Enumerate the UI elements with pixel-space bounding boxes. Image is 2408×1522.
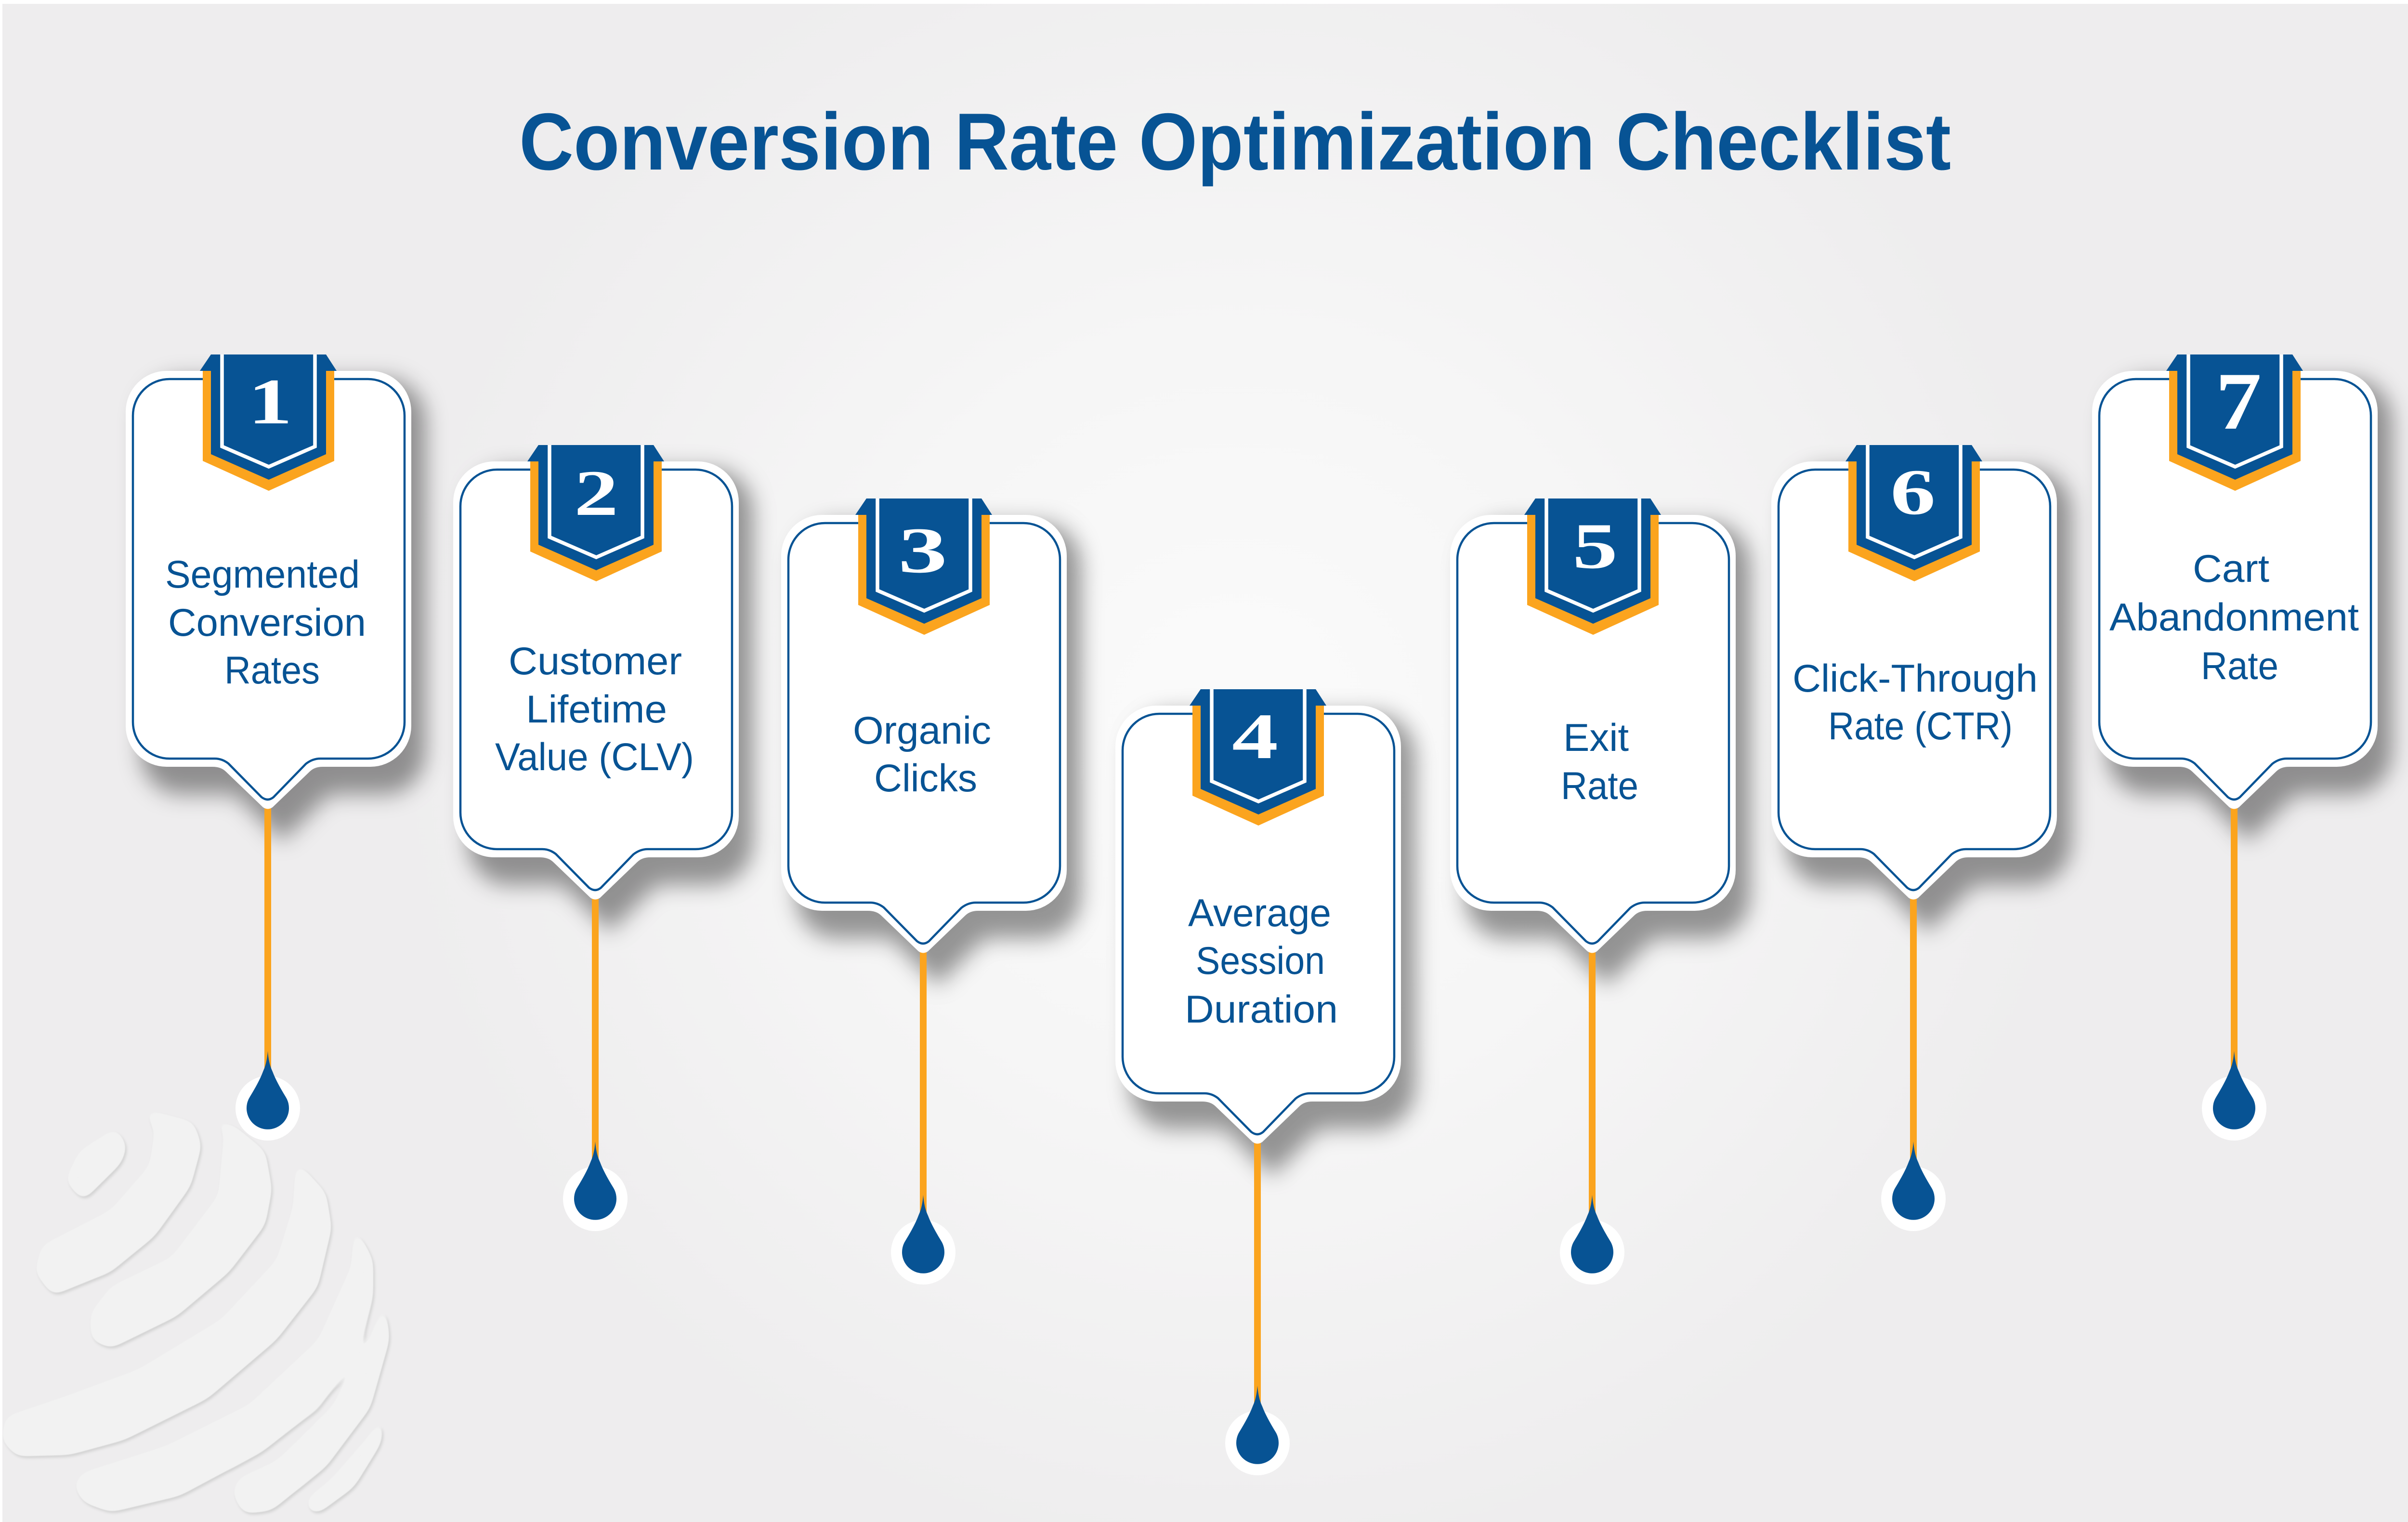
ribbon badge 4 (1190, 689, 1326, 826)
number 7: 7 (2215, 356, 2262, 446)
label 2 (495, 640, 694, 779)
ribbon badge 5 (1524, 499, 1661, 635)
callout panel 7 (2092, 371, 2378, 809)
number 2: 2 (574, 458, 618, 529)
label 1: Segmented (165, 553, 360, 596)
card 7: Cart Abandonment Rate (2092, 354, 2392, 1141)
label 5: Exit (1563, 716, 1629, 760)
card 1: Segmented Conversion Rates (126, 354, 426, 1141)
title: Conversion Rate Optimization Checklist (519, 96, 1951, 187)
number 4: 4 (1232, 701, 1278, 773)
number 6: 6 (1890, 457, 1936, 528)
label 7: Cart (2193, 547, 2269, 590)
callout panel 6 (1771, 461, 2057, 900)
label 4 (1185, 892, 1338, 1031)
drop marker 2 (563, 1142, 628, 1231)
connector line 7 (2231, 807, 2238, 1081)
connector line 5 (1589, 951, 1596, 1225)
ribbon badge 7 (2166, 354, 2303, 491)
label 6 (1793, 657, 2038, 748)
label 1: Rates (224, 649, 320, 692)
callout panel 1 (126, 371, 411, 809)
label 4: Duration (1185, 988, 1338, 1031)
label 6: Rate (CTR) (1828, 705, 2013, 748)
ribbon badge 3 (855, 499, 992, 635)
drop marker 4 (1225, 1386, 1290, 1475)
ribbon badge 6 (1845, 445, 1982, 581)
connector line 4 (1254, 1142, 1261, 1416)
label 2: Lifetime (526, 688, 667, 731)
callout panel 5 (1450, 515, 1736, 953)
number 5: 5 (1572, 511, 1618, 582)
label 1: Conversion (168, 601, 366, 644)
label 4: Session (1196, 939, 1325, 983)
label 7: Rate (2201, 644, 2278, 688)
connector line 2 (592, 897, 599, 1172)
label 3: Organic (853, 709, 991, 752)
decorative globe (1, 1108, 390, 1514)
label 6: Click-Through (1793, 657, 2038, 700)
callout panel 2 (453, 461, 739, 900)
drop marker 3 (891, 1195, 955, 1285)
card 5: Exit Rate (1450, 499, 1750, 1285)
card 6: Click-Through Rate (CTR) (1771, 445, 2071, 1231)
drop marker 6 (1881, 1142, 1946, 1231)
connector line 3 (920, 951, 927, 1225)
label 3 (853, 709, 991, 800)
label 3: Clicks (874, 757, 977, 800)
label 2: Customer (509, 640, 682, 683)
card 4: Average Session Duration (1115, 689, 1415, 1475)
label 1 (165, 553, 366, 692)
label 2: Value (CLV) (495, 735, 694, 779)
ribbon badge 2 (527, 445, 664, 581)
label 4: Average (1188, 892, 1331, 935)
label 7 (2109, 547, 2359, 688)
label 7: Abandonment (2109, 596, 2359, 639)
drop marker 5 (1560, 1195, 1624, 1285)
connector line 6 (1910, 897, 1917, 1172)
callout panel 4 (1115, 706, 1401, 1143)
connector line 1 (264, 807, 271, 1081)
card 2: Customer Lifetime Value (CLV) (453, 445, 753, 1231)
number 3: 3 (898, 515, 947, 587)
drop marker 1 (236, 1051, 300, 1141)
label 5: Rate (1561, 764, 1638, 808)
callout panel 3 (781, 515, 1067, 953)
card 3: Organic Clicks (781, 499, 1081, 1285)
drop marker 7 (2202, 1051, 2266, 1141)
ribbon badge 1 (200, 354, 337, 491)
number 1: 1 (248, 366, 292, 438)
label 5 (1561, 716, 1638, 808)
